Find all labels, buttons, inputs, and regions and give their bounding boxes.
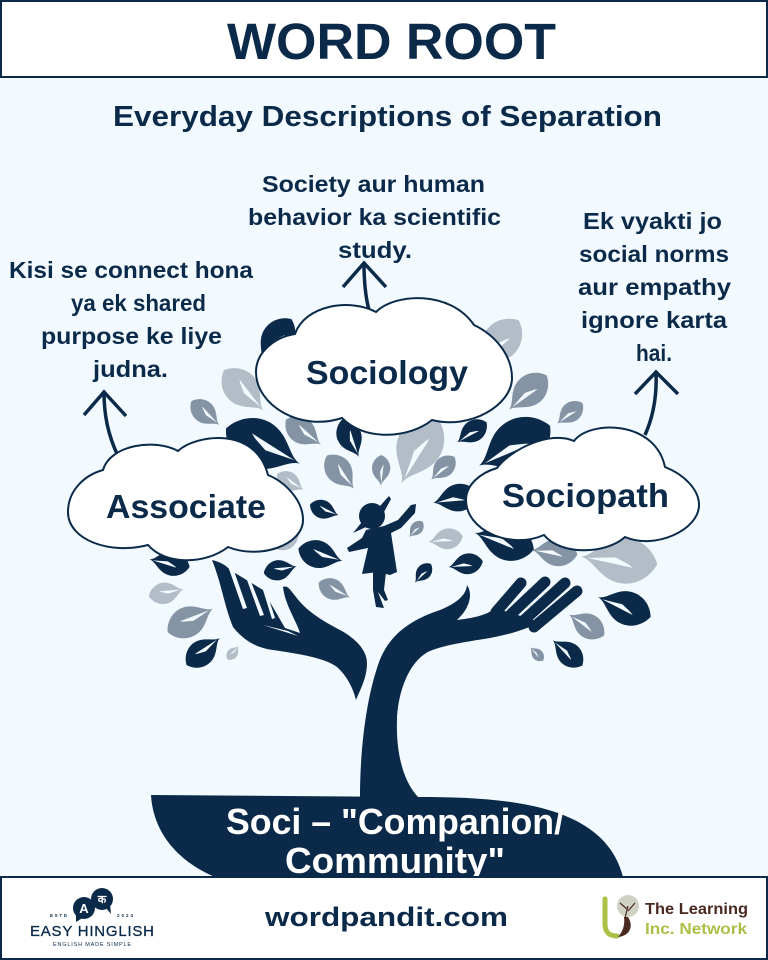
arrow: associate xyxy=(84,392,126,456)
definition: sociopath: social norms xyxy=(579,241,729,267)
arrow: sociology xyxy=(343,263,386,310)
logo: the learning inc network: Inc. Network xyxy=(645,921,747,938)
logo: easy hinglish: ENGLISH MADE SIMPLE xyxy=(53,942,131,948)
definition: sociology: behavior ka scientific xyxy=(248,204,501,230)
root ground xyxy=(151,795,623,877)
definition: associate: purpose ke liye xyxy=(41,323,222,349)
title band xyxy=(1,1,767,77)
cloud: sociology xyxy=(256,298,512,435)
logo: easy hinglish: A xyxy=(79,901,89,916)
logo: the learning inc network: The Learning xyxy=(645,901,748,918)
arrow: sociopath xyxy=(635,372,678,435)
root label: Community" xyxy=(285,840,505,881)
definition: sociopath xyxy=(578,208,731,366)
logo: easy hinglish: क xyxy=(97,894,107,906)
definition: associate: judna. xyxy=(92,356,168,382)
logo: the learning inc network xyxy=(605,895,748,938)
definition: associate: ya ek shared xyxy=(71,290,206,316)
title band: WORD ROOT xyxy=(227,13,556,70)
logo: easy hinglish: ESTD xyxy=(50,913,68,918)
cloud: sociopath xyxy=(466,428,699,550)
cloud: associate xyxy=(68,438,303,560)
root label: Soci – "Companion/ xyxy=(226,801,564,842)
cloud: sociology: Sociology xyxy=(306,354,469,391)
definition: sociology: study. xyxy=(338,237,412,263)
logo: easy hinglish xyxy=(30,888,154,948)
definition: sociopath: Ek vyakti jo xyxy=(583,208,722,234)
definition: sociology: Society aur human xyxy=(262,171,485,197)
definition: sociopath: hai. xyxy=(636,340,672,366)
subtitle heading: Everyday Descriptions of Separation xyxy=(113,101,662,133)
logo: easy hinglish: 2024 xyxy=(117,913,133,918)
cloud: associate: Associate xyxy=(106,488,266,525)
falling leaves xyxy=(147,308,659,675)
definition: sociology xyxy=(248,171,501,263)
child silhouette xyxy=(347,496,416,608)
definition: sociopath: aur empathy xyxy=(578,274,731,300)
root label xyxy=(226,801,564,881)
cloud: sociopath: Sociopath xyxy=(502,477,669,514)
website: wordpandit.com xyxy=(264,902,508,932)
definition: associate: Kisi se connect hona xyxy=(9,257,253,283)
left hand xyxy=(212,560,367,700)
definition: sociopath: ignore karta xyxy=(581,307,727,333)
footer band xyxy=(1,877,767,959)
logo: easy hinglish: EASY HINGLISH xyxy=(30,923,154,940)
tree trunk with right hand xyxy=(360,582,577,797)
definition: associate xyxy=(9,257,253,382)
